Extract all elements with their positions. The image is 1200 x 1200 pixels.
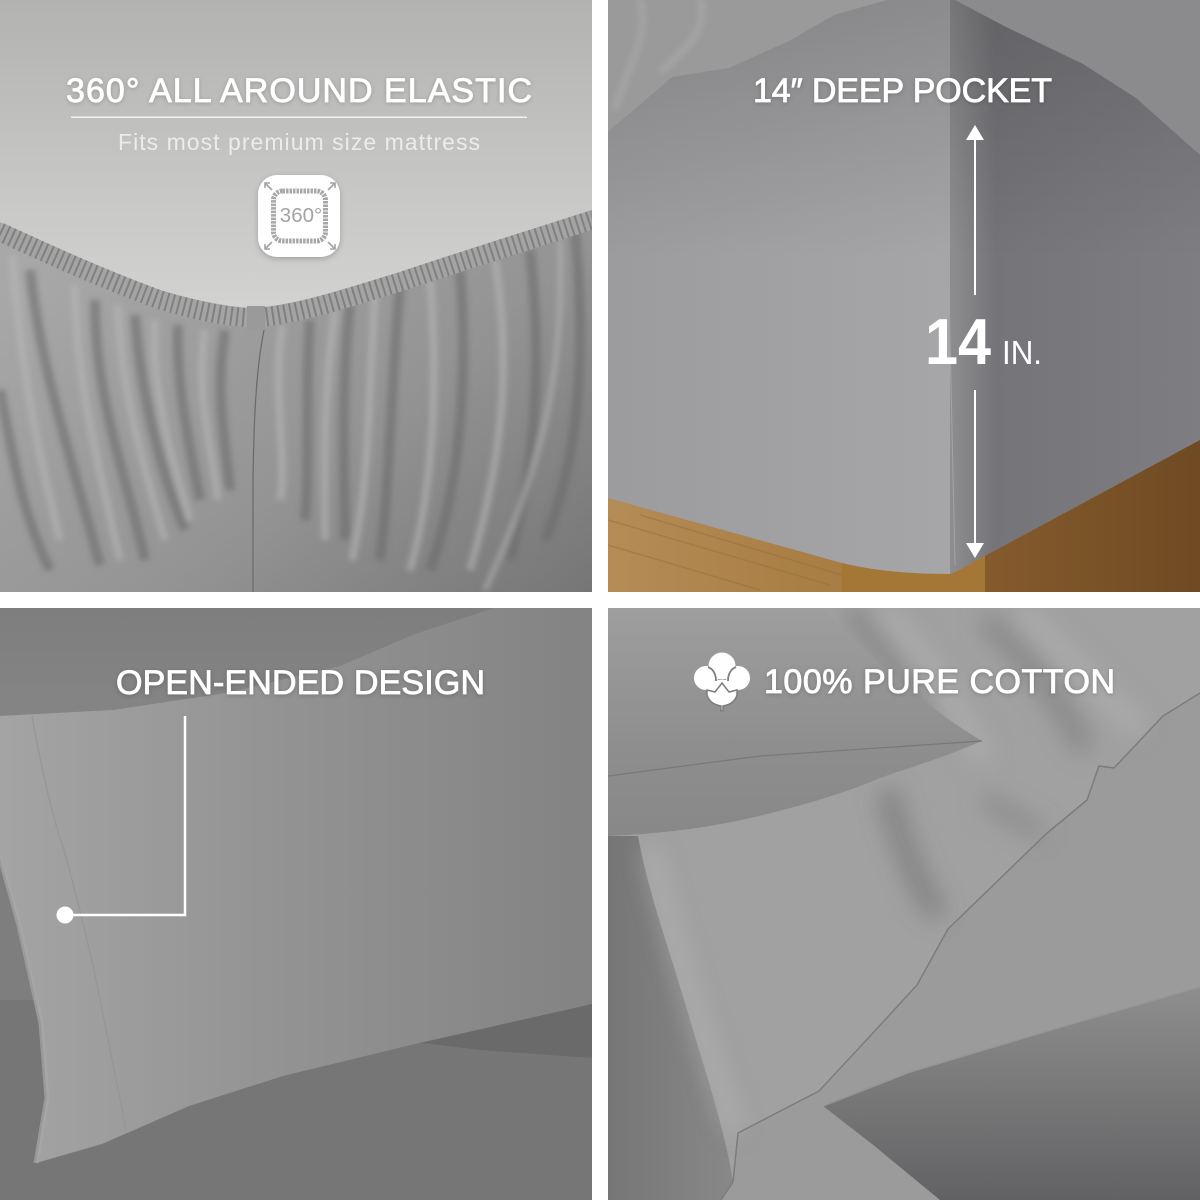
heading: 100% pure cotton: 100% PURE COTTON	[764, 663, 1115, 701]
arrow: height down	[966, 390, 984, 558]
measurement: 14 in.: IN.	[1002, 334, 1042, 371]
overhanging flat sheet right	[955, 0, 1200, 155]
panel: deep pocket	[608, 0, 1200, 592]
panel: open ended pillow	[0, 608, 592, 1200]
overhanging flat sheet left	[608, 0, 887, 132]
heading: 14 inch deep pocket: 14″ DEEP POCKET	[753, 72, 1052, 110]
icon: 360 elastic badge: 360°	[280, 204, 322, 227]
satin inner edge	[0, 857, 47, 1163]
divider under heading	[71, 116, 527, 118]
arrow: height up	[966, 125, 984, 295]
gathered elastic band	[0, 220, 592, 318]
mattress left face	[608, 0, 950, 574]
measurement: 14 in.: 14	[925, 305, 991, 378]
flat sheet with hem	[608, 608, 1200, 1200]
fitted sheet fabric	[0, 210, 592, 592]
measurement: 14 in.	[925, 305, 1042, 378]
wooden bed frame	[608, 430, 1200, 592]
lower sheet	[60, 1042, 592, 1200]
pillow	[0, 608, 592, 1163]
icon: 360 elastic badge	[258, 175, 340, 259]
heading: 360 all around elastic: 360° ALL AROUND ELASTIC	[66, 72, 532, 110]
pillow hem	[32, 716, 82, 920]
mattress right face	[950, 0, 1200, 574]
panel: pure cotton	[608, 608, 1200, 1200]
subheading: Fits most premium size mattress	[118, 129, 480, 155]
upper pillow	[608, 652, 981, 836]
panel: 360 elastic	[0, 0, 592, 592]
lower pillow	[823, 987, 1200, 1200]
callout line to pillow opening	[56, 716, 185, 924]
centre seam	[253, 330, 264, 592]
heading: open-ended design: OPEN-ENDED DESIGN	[116, 664, 485, 702]
icon: cotton boll	[694, 652, 750, 711]
